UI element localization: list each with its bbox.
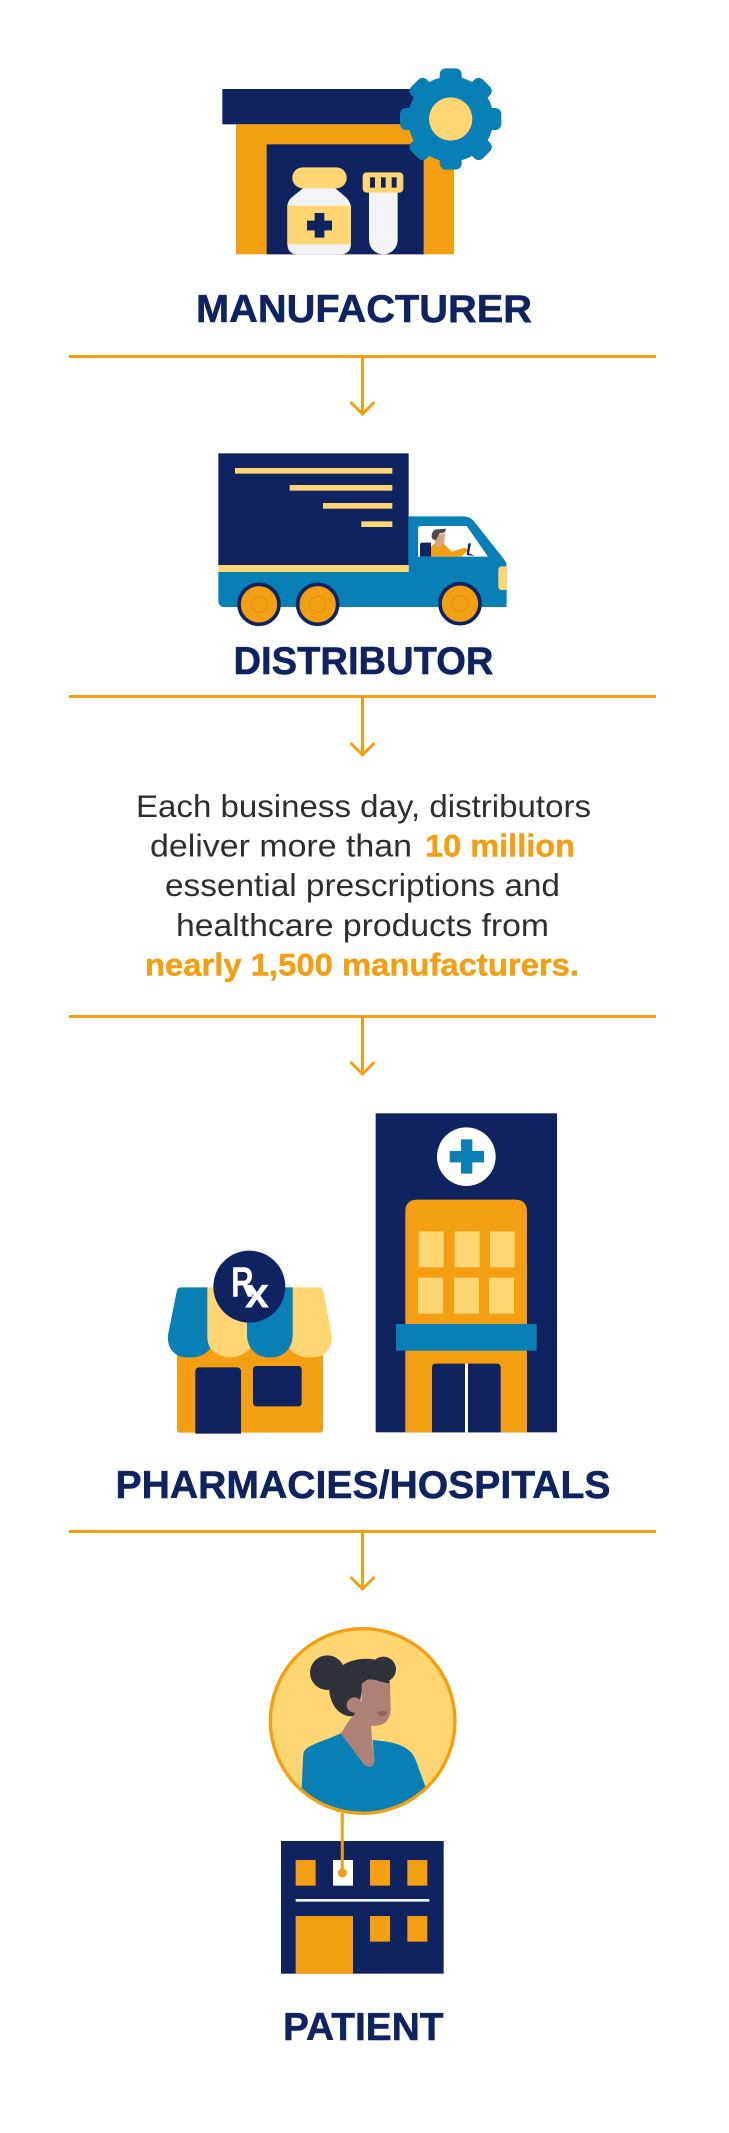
factory door opening: [267, 144, 424, 254]
Rx badge: R: [231, 1259, 254, 1307]
driver: [420, 529, 475, 557]
headlight: [498, 566, 507, 590]
icon: apartment building: [281, 1841, 444, 1974]
arrow: pharmacies to patient: [69, 1532, 656, 1589]
Rx badge: x: [245, 1270, 270, 1318]
text block: distributor statistic: 10 million: [425, 828, 575, 864]
text block: distributor statistic: Each business day, distributors: [136, 788, 591, 824]
heading: pharmacies and hospitals: PHARMACIES/HOSPITALS: [116, 1464, 610, 1507]
truck wheels: [239, 584, 480, 624]
truck body: [218, 516, 507, 607]
patient hair: [310, 1655, 396, 1716]
arrow: distributor to statistic: [69, 696, 656, 755]
entrance canopy: [396, 1324, 537, 1351]
medical cross badge: [437, 1127, 496, 1186]
factory walls: [236, 124, 454, 254]
Rx badge: [213, 1251, 285, 1323]
text block: distributor statistic: nearly 1,500 manufacturers.: [145, 946, 579, 982]
entrance doors: [432, 1364, 501, 1432]
store door: [195, 1367, 241, 1434]
text block: distributor statistic: essential prescriptions and: [165, 867, 560, 903]
icon: hospital: [376, 1113, 557, 1432]
cab window: [418, 526, 488, 557]
cargo stripe: [218, 565, 409, 572]
hospital backdrop: [376, 1113, 557, 1432]
text block: distributor statistic: [136, 788, 591, 982]
arrow: statistic to pharmacies: [69, 1016, 656, 1074]
heading: distributor: DISTRIBUTOR: [234, 640, 494, 683]
arrow: manufacturer to distributor: [69, 356, 656, 414]
hospital windows: [418, 1231, 515, 1314]
icon: gear: [400, 68, 501, 170]
patient lips: [377, 1711, 388, 1716]
text block: distributor statistic: deliver more than: [150, 828, 412, 864]
factory roof: [222, 89, 419, 124]
patient shirt: [302, 1733, 426, 1812]
icon: pharmacy storefront: [168, 1251, 332, 1434]
icon: manufacturer factory: [222, 68, 501, 254]
icon: test tube: [363, 172, 403, 254]
cargo speed lines: [235, 468, 392, 527]
icon: patient portrait: [270, 1629, 455, 1820]
icon: delivery truck: [218, 453, 507, 624]
awning: [168, 1287, 332, 1357]
text block: distributor statistic: healthcare products from: [176, 907, 549, 943]
building windows: [296, 1860, 427, 1942]
hospital tower: [405, 1200, 527, 1432]
heading: patient: PATIENT: [283, 2006, 444, 2049]
icon: medicine bottle: [287, 167, 351, 254]
connector: patient to building window: [338, 1813, 347, 1878]
floor line: [296, 1899, 429, 1902]
store window: [253, 1366, 302, 1406]
heading: manufacturer: MANUFACTURER: [196, 288, 532, 331]
building door: [296, 1916, 353, 1974]
store body: [177, 1347, 323, 1433]
patient face and neck: [341, 1680, 391, 1767]
truck cargo box: [218, 453, 409, 565]
